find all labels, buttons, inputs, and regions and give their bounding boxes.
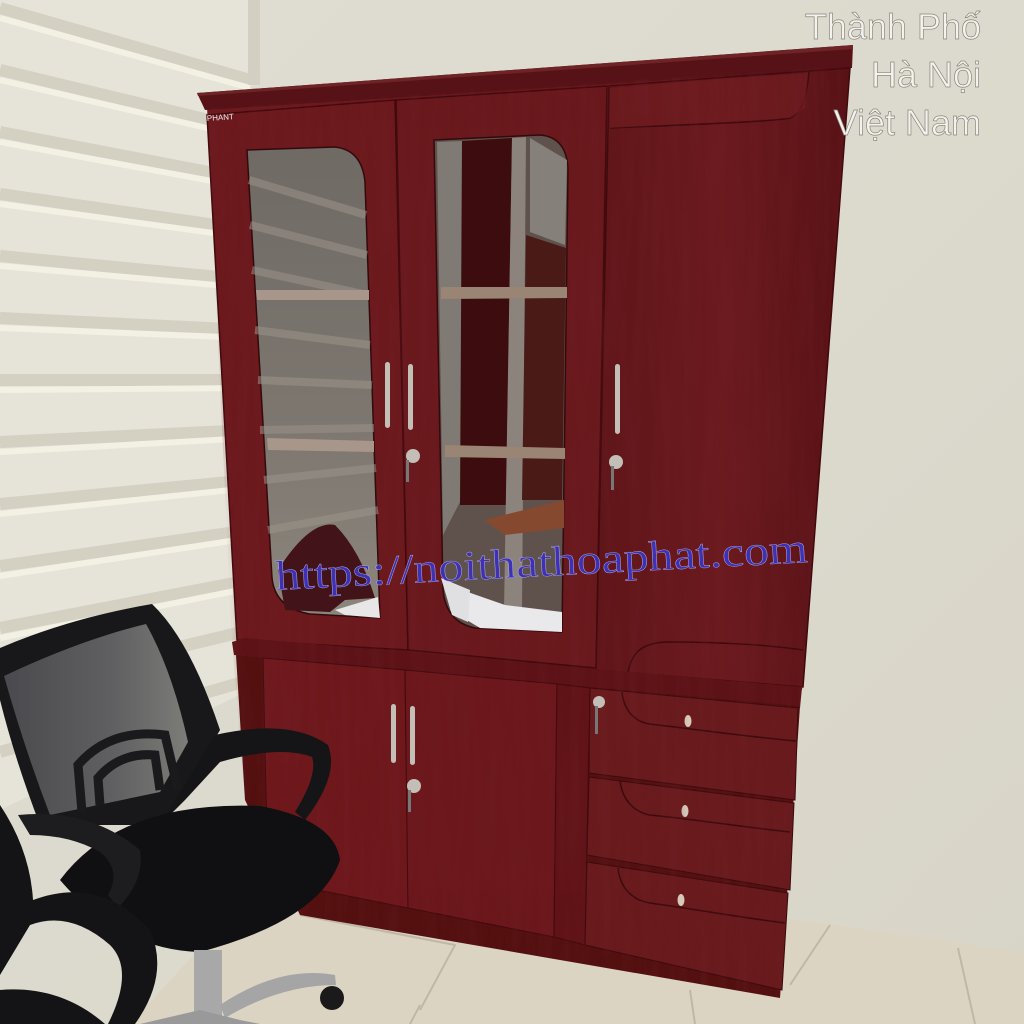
left glass pane — [247, 147, 380, 618]
watermark location text: Hà Nội — [871, 54, 981, 95]
cabinet lower body — [236, 655, 800, 998]
cabinet middle shelf — [232, 638, 802, 708]
right door — [596, 68, 850, 687]
watermark url: https://noithathoaphat.com — [274, 526, 809, 600]
watermark location text: Việt Nam — [834, 102, 981, 143]
handles and locks — [385, 362, 623, 812]
second chair foreground — [0, 805, 157, 1024]
left door — [207, 100, 408, 650]
office chair — [0, 604, 344, 1024]
wood grain overlay — [212, 70, 842, 982]
window blinds — [0, 0, 260, 810]
cabinet upper body — [197, 45, 853, 690]
lower right door — [405, 670, 557, 937]
floor — [130, 905, 1024, 1024]
watermark location text: Thành Phố — [805, 6, 981, 47]
right glass pane — [434, 135, 568, 632]
drawer 2 — [587, 777, 794, 890]
watermark location text — [805, 6, 981, 143]
middle door — [396, 86, 607, 668]
side panel — [554, 684, 590, 945]
brand logo: PHANT — [207, 112, 234, 123]
lower left door — [263, 658, 408, 908]
drawer 1 — [589, 688, 798, 800]
drawer 3 — [585, 862, 788, 990]
cabinet top cornice — [197, 45, 853, 110]
